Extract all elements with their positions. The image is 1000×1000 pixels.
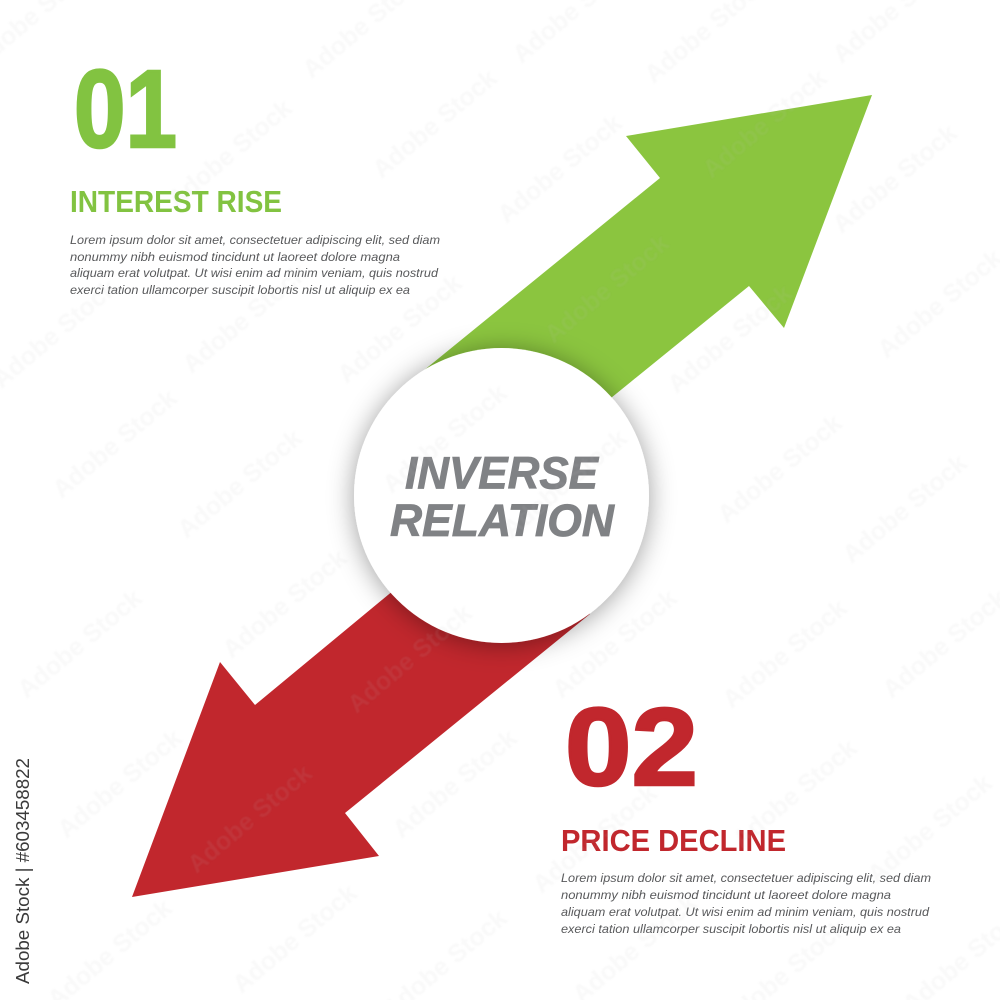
heading: interest rise: INTEREST RISE (70, 184, 282, 219)
side stock label: Adobe Stock | #603458822 (13, 758, 33, 984)
watermark pattern: Adobe Stock (539, 229, 674, 349)
number 01: 01 (74, 48, 177, 171)
center label: INVERSE (405, 448, 600, 498)
watermark pattern: Adobe Stock (377, 379, 512, 499)
watermark pattern: Adobe Stock (47, 384, 182, 504)
watermark pattern: Adobe Stock (172, 424, 307, 544)
green up arrow (412, 95, 872, 500)
watermark pattern: Adobe Stock (367, 64, 502, 184)
watermark pattern: Adobe Stock (497, 424, 632, 544)
body text 2: Lorem ipsum dolor sit amet, consectetuer adipiscing elit, sed diam (561, 871, 931, 885)
watermark pattern: Adobe Stock (827, 119, 962, 239)
watermark pattern: Adobe Stock (217, 544, 352, 664)
heading: price decline: PRICE DECLINE (561, 823, 786, 858)
watermark pattern: Adobe Stock (527, 779, 662, 899)
watermark pattern: Adobe Stock (332, 269, 467, 389)
watermark pattern: Adobe Stock (697, 64, 832, 184)
body text 2: nonummy nibh euismod tincidunt ut laoreet dolore magna (561, 888, 891, 902)
section 02: price decline (561, 686, 931, 936)
watermark pattern: Adobe Stock (547, 584, 682, 704)
red down arrow (132, 500, 590, 897)
watermark pattern: Adobe Stock (162, 94, 297, 214)
watermark pattern: Adobe Stock (712, 409, 847, 529)
watermark pattern: Adobe Stock (387, 724, 522, 844)
watermark pattern: Adobe Stock (727, 734, 862, 854)
body text 1: aliquam erat volutpat. Ut wisi enim ad minim veniam, quis nostrud (70, 266, 438, 280)
watermark pattern: Adobe Stock (12, 584, 147, 704)
body text 1: exerci tation ullamcorper suscipit lobortis nisl ut aliquip ex ea (70, 283, 410, 297)
watermark pattern: Adobe Stock (862, 769, 997, 889)
watermark pattern: Adobe Stock (342, 599, 477, 719)
section 01: interest rise (70, 48, 440, 297)
watermark pattern: Adobe Stock (837, 449, 972, 569)
watermark pattern: Adobe Stock (662, 279, 797, 399)
body text 2: aliquam erat volutpat. Ut wisi enim ad minim veniam, quis nostrud (561, 905, 929, 919)
body text 1: nonummy nibh euismod tincidunt ut laoreet dolore magna (70, 250, 400, 264)
watermark pattern: Adobe Stock (227, 879, 362, 999)
body text 1 (70, 233, 440, 297)
body text 1: Lorem ipsum dolor sit amet, consectetuer adipiscing elit, sed diam (70, 233, 440, 247)
number 02: 02 (565, 686, 698, 809)
watermark pattern: Adobe Stock (717, 594, 852, 714)
watermark pattern: Adobe Stock (492, 109, 627, 229)
center circle (354, 348, 649, 643)
watermark pattern: Adobe Stock (52, 724, 187, 844)
watermark pattern: Adobe Stock (177, 259, 312, 379)
center label (390, 448, 615, 546)
body text 2 (561, 871, 931, 936)
watermark pattern: Adobe Stock (182, 759, 317, 879)
center label: RELATION (390, 495, 615, 546)
body text 2: exerci tation ullamcorper suscipit lobortis nisl ut aliquip ex ea (561, 922, 901, 936)
